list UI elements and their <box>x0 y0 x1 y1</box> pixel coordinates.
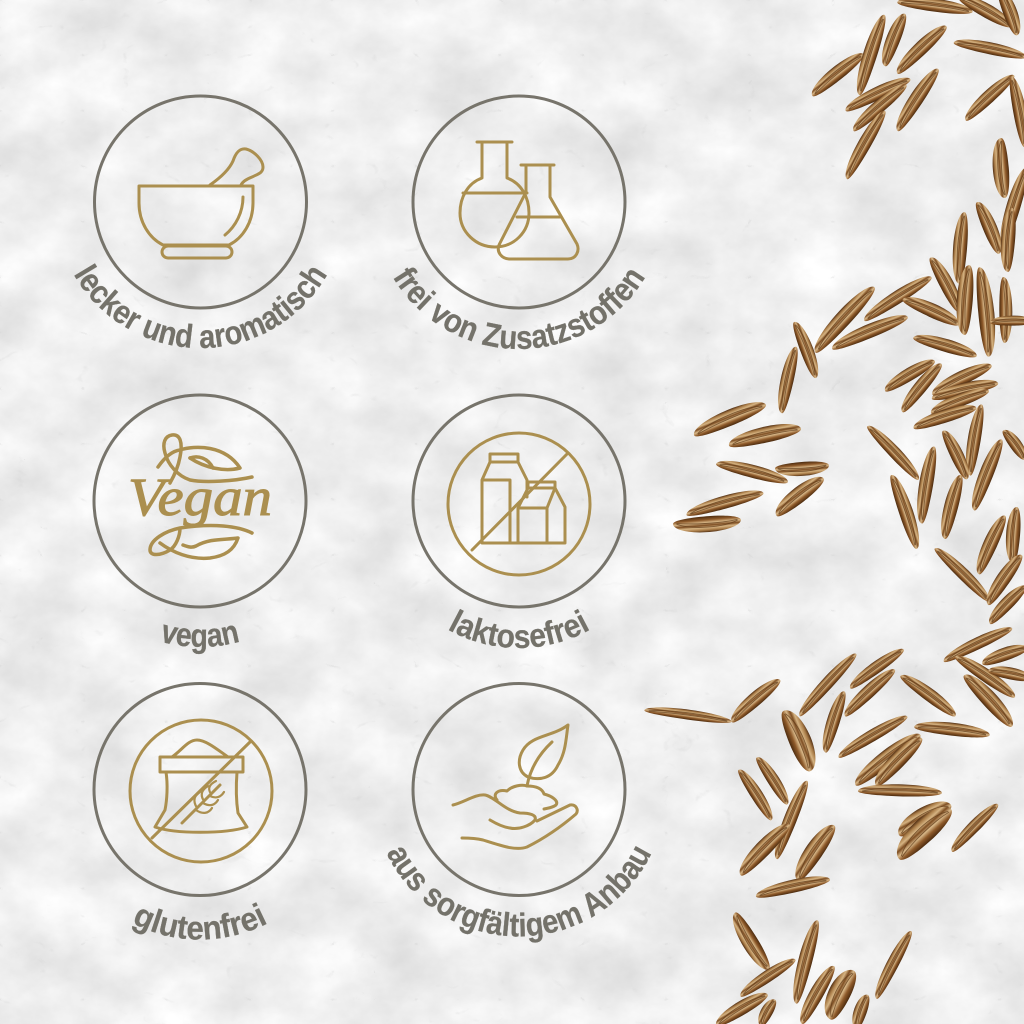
caraway seeds: left cluster <box>673 396 830 535</box>
caraway seeds: lower cluster <box>644 644 1001 900</box>
label: glutenfrei <box>132 902 266 940</box>
label: vegan <box>163 624 239 654</box>
badge: lecker und aromatisch <box>74 94 327 348</box>
label: frei von Zusatzstoffen <box>394 268 645 350</box>
icon: crossed-out milk cartons <box>448 433 590 575</box>
icon: vegan script logo with leaves <box>128 435 272 558</box>
label: aus sorgfältigem Anbau <box>388 846 652 943</box>
badge: vegan <box>92 394 308 654</box>
badge: frei von Zusatzstoffen <box>394 94 645 350</box>
icon: hand holding seedling <box>453 725 577 848</box>
label: lecker und aromatisch <box>74 263 327 348</box>
label: laktosefrei <box>448 608 590 648</box>
badge: laktosefrei <box>412 394 626 648</box>
caraway seeds: top cluster <box>806 0 1024 250</box>
icon: laboratory flasks <box>460 142 578 259</box>
icon: vegan script logo with leaves: Vegan <box>128 467 272 527</box>
caraway seeds: middle cluster <box>773 199 1024 551</box>
icon: crossed-out grain sack <box>130 720 272 862</box>
badge: aus sorgfältigem Anbau <box>388 682 652 943</box>
caraway seeds: right cluster <box>932 506 1024 731</box>
badge: glutenfrei <box>92 682 308 940</box>
caraway seeds: bottom cluster <box>712 910 916 1024</box>
icon: mortar and pestle <box>139 149 263 258</box>
